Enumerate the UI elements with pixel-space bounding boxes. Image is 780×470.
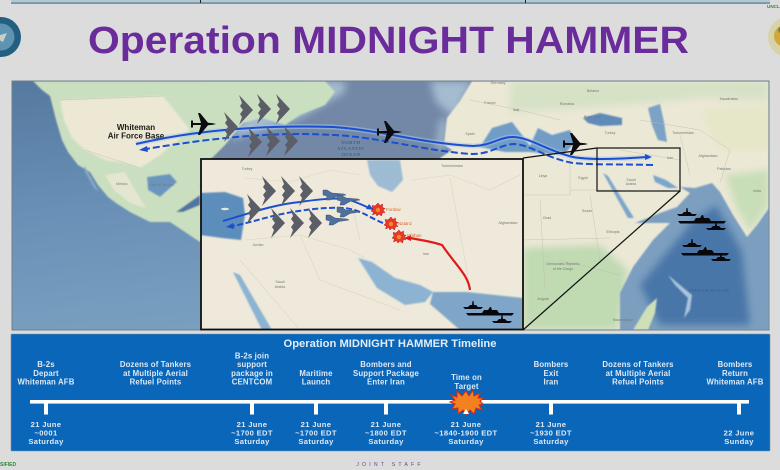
event: bombers exit iran: Bombers	[534, 360, 569, 369]
event: b-2s depart	[18, 360, 75, 446]
top strip	[11, 0, 770, 4]
map: labels: Ethiopia	[606, 230, 620, 234]
event: b-2s join support package: CENTCOM	[232, 378, 272, 386]
target: fordow	[371, 203, 401, 216]
event: tankers return	[602, 360, 674, 386]
inset: fighter escorts	[323, 190, 360, 225]
map: north atlantic shade	[212, 82, 470, 158]
label: whiteman air force base: Air Force Base	[108, 132, 165, 140]
event: bombers exit iran: ~1930 EDT	[530, 428, 572, 438]
inset: place labels: Turkey	[242, 167, 253, 171]
target: natanz	[384, 217, 412, 230]
event: maritime launch: Maritime	[299, 369, 333, 378]
event: tankers return: Dozens of Tankers	[602, 360, 674, 369]
target: isfahan: Isfahan	[407, 233, 422, 238]
map: labels: Italy	[513, 108, 519, 112]
event: bombers return: Whiteman AFB	[707, 378, 764, 386]
inset: place labels: Saudi	[275, 280, 285, 284]
flight route: outbound solid	[136, 127, 652, 160]
timeline axis	[30, 400, 749, 414]
map: labels: Sudan	[582, 209, 592, 213]
label: north atlantic ocean: NORTH	[341, 140, 361, 145]
event: time on target: Target	[454, 382, 479, 391]
icons: tanker aircraft	[191, 113, 588, 155]
flight route: return dashed	[139, 134, 653, 165]
map: labels: Romania	[560, 102, 574, 106]
marking: classification bottom left: SIFIED	[0, 462, 17, 468]
map: madagascar and ridge	[633, 275, 692, 330]
event: bombers exit iran	[530, 360, 572, 446]
event: bombers enter iran: Support Package	[353, 369, 419, 378]
inset: place labels: Turkmenistan	[441, 164, 463, 168]
label: whiteman air force base: Whiteman	[117, 123, 155, 132]
map: labels: Belarus	[587, 89, 599, 93]
inset route: return dashed	[226, 208, 383, 229]
map: labels: Turkey	[605, 131, 616, 135]
map: labels: Iran	[667, 156, 673, 160]
map: labels: Black Sea	[584, 115, 600, 119]
event: b-2s join support package: support	[237, 360, 267, 369]
event: bombers enter iran	[353, 360, 419, 446]
event: bombers return: Return	[722, 369, 748, 378]
map: labels: Mozambique	[613, 318, 633, 322]
map: ocean	[12, 81, 769, 330]
map: labels: Gulf of Mexico	[151, 183, 173, 187]
event: time on target: 21 June	[451, 420, 481, 429]
inset connector lines	[523, 148, 680, 330]
flight route halo	[136, 127, 650, 159]
title: Operation MIDNIGHT HAMMER	[88, 20, 689, 62]
event: tankers return: at Multiple Aerial	[606, 369, 670, 378]
event: bombers exit iran: 21 June	[536, 420, 566, 429]
event: b-2s depart: Depart	[33, 369, 59, 378]
event: tankers outbound	[120, 360, 192, 386]
target: fordow: Fordow	[386, 207, 401, 212]
panel: inset map of iran strike	[200, 159, 523, 330]
inset: maritime strike route	[404, 235, 470, 290]
map: north america	[33, 81, 335, 242]
event: b-2s join support package: Saturday	[234, 437, 270, 446]
event: b-2s join support package: B-2s join	[235, 352, 269, 360]
map: labels: Afghanistan	[699, 154, 717, 158]
map: borders	[60, 96, 730, 290]
event: bombers enter iran: Saturday	[368, 437, 404, 446]
event: b-2s join support package: ~1700 EDT	[231, 428, 273, 438]
event: bombers exit iran: Saturday	[533, 437, 569, 446]
seal: joint chiefs	[768, 17, 780, 57]
target: natanz: Natanz	[398, 221, 412, 226]
map: labels: Kazakhstan	[720, 97, 738, 101]
event: b-2s join support package: 21 June	[237, 420, 267, 429]
event: b-2s join support package	[231, 352, 273, 446]
event: maritime launch: Launch	[302, 378, 330, 386]
map: labels: Egypt	[578, 176, 588, 180]
map: vegetation zones	[510, 81, 769, 330]
event: maritime launch	[295, 369, 337, 446]
timeline heading: Operation MIDNIGHT HAMMER Timeline	[284, 338, 496, 350]
inset: place labels: Iran	[423, 252, 429, 256]
map: eurasia and africa	[440, 81, 769, 330]
event: b-2s depart: 21 June	[31, 420, 61, 429]
inset: waters	[200, 160, 523, 330]
footer: joint staff: JOINT STAFF	[356, 462, 424, 468]
icon: explosion	[450, 390, 484, 415]
event: bombers enter iran: 21 June	[371, 420, 401, 429]
map: labels: Democratic Republic	[546, 262, 580, 266]
event: bombers exit iran: Exit	[544, 369, 559, 378]
label: north atlantic ocean	[337, 141, 364, 156]
map: coastal shelf	[230, 81, 472, 150]
inset route: outbound solid	[223, 199, 374, 221]
map: labels: of the Congo	[553, 267, 573, 271]
event: bombers return: Sunday	[724, 437, 754, 446]
event: bombers exit iran: Iran	[544, 378, 559, 386]
map: labels: Arabia	[626, 182, 636, 186]
icons: b-2 bomber formation	[224, 94, 298, 157]
event: tankers outbound: at Multiple Aerial	[123, 369, 188, 378]
label: indian ocean: INDIAN OCEAN	[689, 288, 729, 293]
label: whiteman air force base	[108, 123, 165, 140]
map: labels: India	[753, 189, 761, 193]
label: north atlantic ocean: ATLANTIC	[337, 146, 365, 151]
map border	[12, 81, 769, 330]
map: labels: Saudi	[626, 178, 636, 182]
map: indian ocean	[620, 183, 769, 330]
map: labels: Chad	[543, 216, 551, 220]
inset: cyprus	[221, 208, 229, 210]
inset: borders	[240, 170, 520, 330]
label: north atlantic ocean: OCEAN	[341, 152, 361, 157]
event: maritime launch: Saturday	[298, 437, 334, 446]
map: labels: Mexico	[116, 182, 128, 186]
event: b-2s depart: Saturday	[28, 437, 64, 446]
map: seas	[480, 104, 678, 218]
event: bombers enter iran: Enter Iran	[367, 378, 405, 386]
event: bombers return: 22 June	[724, 428, 754, 438]
map: labels: Germany	[491, 81, 506, 85]
event: time on target: Saturday	[448, 437, 484, 446]
event: tankers outbound: Refuel Points	[130, 378, 182, 386]
seal: department of defense	[0, 17, 21, 57]
target box on main map	[597, 148, 680, 191]
map: labels: Turkmenistan	[672, 131, 694, 135]
inset: place labels: Afghanistan	[499, 221, 517, 225]
map: labels: Spain	[465, 132, 475, 136]
inset: place labels	[242, 164, 517, 289]
event: bombers return	[707, 360, 764, 446]
event: time on target	[435, 373, 497, 446]
event: b-2s join support package: package in	[231, 369, 273, 378]
map: labels: Libya	[539, 174, 547, 178]
inset: place labels: Jordan	[252, 243, 264, 247]
inset: ships	[463, 301, 514, 323]
target: isfahan	[392, 230, 422, 243]
event: bombers enter iran: Bombers and	[360, 360, 412, 369]
event: b-2s depart: B-2s	[37, 360, 55, 369]
event: bombers enter iran: ~1800 EDT	[365, 428, 407, 438]
inset: frame	[201, 159, 523, 330]
map: labels: Pakistan	[717, 167, 731, 171]
inset: place labels: Arabia	[275, 285, 285, 289]
event: time on target: ~1840-1900 EDT	[435, 428, 497, 438]
event: tankers return: Refuel Points	[612, 378, 664, 386]
map: deep indian ocean	[640, 205, 750, 325]
icons: ships group north	[677, 208, 726, 230]
event: maritime launch: ~1700 EDT	[295, 428, 337, 438]
panel: timeline	[11, 334, 770, 451]
icons: ships group south	[681, 239, 731, 261]
event: tankers outbound: Dozens of Tankers	[120, 360, 192, 369]
panel: world map	[12, 81, 769, 330]
event: b-2s depart: ~0001	[34, 428, 58, 438]
event: bombers return: Bombers	[718, 360, 753, 369]
map: labels: France	[484, 101, 496, 105]
map: labels	[116, 81, 761, 322]
map: labels: Angola	[537, 297, 549, 301]
inset: b-2 bomber formation	[247, 176, 322, 238]
event: maritime launch: 21 June	[301, 420, 331, 429]
event: time on target: Time on	[451, 373, 482, 382]
event: b-2s depart: Whiteman AFB	[18, 378, 75, 386]
